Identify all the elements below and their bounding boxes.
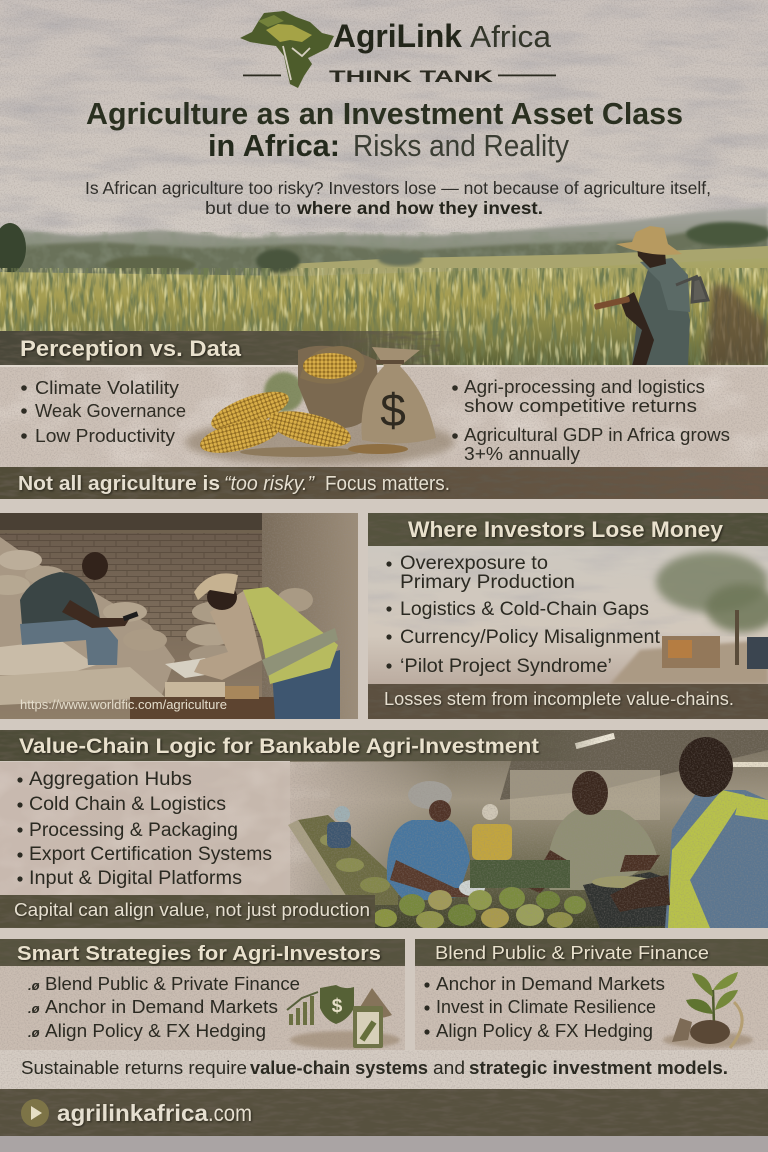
closing statement: value-chain systems bbox=[250, 1058, 428, 1078]
list: data points: Agri-processing and logistics bbox=[464, 376, 705, 397]
list with leaf bullets: .ø bbox=[28, 1001, 40, 1016]
back worker in vest bbox=[472, 804, 512, 860]
list of value-chain elements bbox=[17, 769, 272, 889]
list: perceived risks: Weak Governance bbox=[35, 400, 186, 421]
panel: blend public and private finance bbox=[415, 939, 768, 1050]
list of losses: Currency/Policy Misalignment bbox=[400, 627, 661, 648]
list of value-chain elements: Input & Digital Platforms bbox=[29, 868, 242, 889]
title: Risks and Reality bbox=[353, 128, 569, 163]
list with leaf bullets: Anchor in Demand Markets bbox=[45, 996, 278, 1017]
list with leaf bullets: Blend Public & Private Finance bbox=[45, 973, 300, 994]
photo: packing house bbox=[0, 730, 768, 929]
list of losses: Primary Production bbox=[400, 572, 575, 593]
list: data points: Agricultural GDP in Africa grows bbox=[464, 424, 730, 445]
conveyor bbox=[288, 815, 398, 905]
callout band: not all agriculture bbox=[0, 467, 768, 499]
title: Agriculture as an Investment Asset Class bbox=[86, 96, 683, 131]
list: perceived risks bbox=[21, 377, 186, 446]
list of value-chain elements: Cold Chain & Logistics bbox=[29, 794, 226, 815]
list with leaf bullets: .ø bbox=[28, 978, 40, 993]
callout band: Losses stem from incomplete value-chains. bbox=[384, 689, 734, 709]
panel: perception vs data body bbox=[0, 365, 768, 468]
list of value-chain elements: Export Certification Systems bbox=[29, 844, 272, 865]
website: agrilinkafrica bbox=[57, 1100, 208, 1126]
crate bbox=[583, 872, 672, 928]
list of strategies: Invest in Climate Resilience bbox=[436, 996, 656, 1017]
heading band bbox=[368, 513, 768, 546]
heading band bbox=[0, 730, 600, 761]
list with leaf bullets: .ø bbox=[28, 1025, 40, 1040]
list of losses: Logistics & Cold-Chain Gaps bbox=[400, 599, 649, 620]
man in hi-vis vest bbox=[194, 573, 340, 719]
list with leaf bullets: Align Policy & FX Hedging bbox=[45, 1020, 266, 1041]
list: perceived risks: Low Productivity bbox=[35, 425, 176, 446]
closing statement: Sustainable returns require bbox=[21, 1058, 247, 1078]
man in hi-vis vest bbox=[610, 737, 768, 928]
heading band: Where Investors Lose Money bbox=[408, 517, 723, 542]
heading band: Smart Strategies for Agri-Investors bbox=[17, 942, 381, 965]
callout band: not all agriculture: Not all agriculture is bbox=[18, 473, 220, 495]
list of losses: Overexposure to bbox=[400, 553, 548, 574]
man seated with phone bbox=[20, 552, 139, 665]
list of strategies bbox=[424, 973, 665, 1041]
dollar sack: $ bbox=[380, 384, 406, 436]
closing statement: strategic investment models. bbox=[469, 1058, 728, 1078]
heading band: Value-Chain Logic for Bankable Agri-Investment bbox=[19, 735, 539, 758]
list: data points: show competitive returns bbox=[464, 395, 697, 416]
open sack of maize bbox=[298, 346, 380, 428]
icon: play button bbox=[21, 1099, 49, 1127]
list: data points: 3+% annually bbox=[464, 443, 581, 464]
list: perceived risks: Climate Volatility bbox=[35, 377, 180, 398]
icon: seedling bbox=[663, 972, 753, 1048]
distant hills bbox=[0, 207, 768, 290]
list with leaf bullets bbox=[28, 973, 300, 1041]
list: data points bbox=[452, 376, 730, 464]
heading band: Blend Public & Private Finance bbox=[435, 942, 709, 963]
panel: where investors lose money bbox=[368, 513, 768, 719]
title: in Africa: bbox=[208, 128, 340, 163]
icon: Africa tree bbox=[240, 11, 334, 88]
dollar sack bbox=[361, 347, 436, 444]
think tank line: THINK TANK bbox=[329, 67, 494, 86]
logo: AgriLink Africa Think Tank bbox=[240, 11, 556, 88]
maize rows bbox=[0, 258, 768, 366]
back worker left bbox=[327, 806, 351, 848]
callout band bbox=[0, 895, 375, 928]
footer band bbox=[0, 1089, 768, 1136]
list of value-chain elements: Processing & Packaging bbox=[29, 820, 238, 841]
closing statement bbox=[0, 1050, 768, 1089]
callout band: Capital can align value, not just production bbox=[14, 899, 370, 920]
panel: smart strategies bbox=[0, 939, 405, 1050]
closing statement: and bbox=[433, 1058, 465, 1078]
list of strategies: Anchor in Demand Markets bbox=[436, 973, 665, 994]
list of losses bbox=[386, 553, 661, 677]
photo: warehouse workers bbox=[0, 513, 358, 719]
brand name bbox=[333, 18, 552, 54]
farmer with straw hat bbox=[594, 226, 708, 366]
icon: chart, shield and clipboard: $ bbox=[332, 996, 343, 1017]
woman in blue bbox=[387, 781, 485, 902]
subtitle: where and how they invest. bbox=[296, 198, 543, 218]
subtitle: Is African agriculture too risky? Investors lose — not because of agriculture itself, bbox=[85, 178, 711, 198]
list of strategies: Align Policy & FX Hedging bbox=[436, 1020, 653, 1041]
callout band: not all agriculture: “too risky.” bbox=[224, 473, 315, 495]
heading band: perception vs data: Perception vs. Data bbox=[20, 336, 242, 361]
green sprig bbox=[264, 372, 304, 412]
icon: chart, shield and clipboard bbox=[287, 985, 400, 1049]
brand name: AgriLink bbox=[333, 18, 462, 54]
hero photo: maize field and farmer bbox=[0, 207, 768, 366]
illustration: maize cobs and money sacks bbox=[197, 346, 436, 460]
maize cobs bbox=[197, 384, 408, 460]
list of losses: ‘Pilot Project Syndrome’ bbox=[400, 656, 612, 677]
grain sacks bbox=[0, 537, 313, 705]
heading band bbox=[415, 939, 768, 966]
panel scene: tree and truck bbox=[368, 546, 768, 684]
avocado pile bbox=[373, 860, 586, 929]
subtitle bbox=[85, 178, 711, 218]
brand name: Africa bbox=[470, 19, 552, 54]
website: .com bbox=[208, 1100, 252, 1126]
heading band: perception vs data bbox=[0, 331, 470, 365]
callout band bbox=[368, 684, 768, 719]
panel: value-chain logic bbox=[0, 730, 768, 929]
title bbox=[86, 96, 683, 163]
list of value-chain elements: Aggregation Hubs bbox=[29, 769, 192, 790]
subtitle: but due to bbox=[205, 198, 291, 218]
source url: https://www.worldfic.com/agriculture bbox=[20, 697, 227, 712]
man in khaki shirt bbox=[528, 771, 660, 893]
table and paperwork bbox=[130, 658, 275, 719]
callout band: not all agriculture: Focus matters. bbox=[325, 473, 450, 495]
